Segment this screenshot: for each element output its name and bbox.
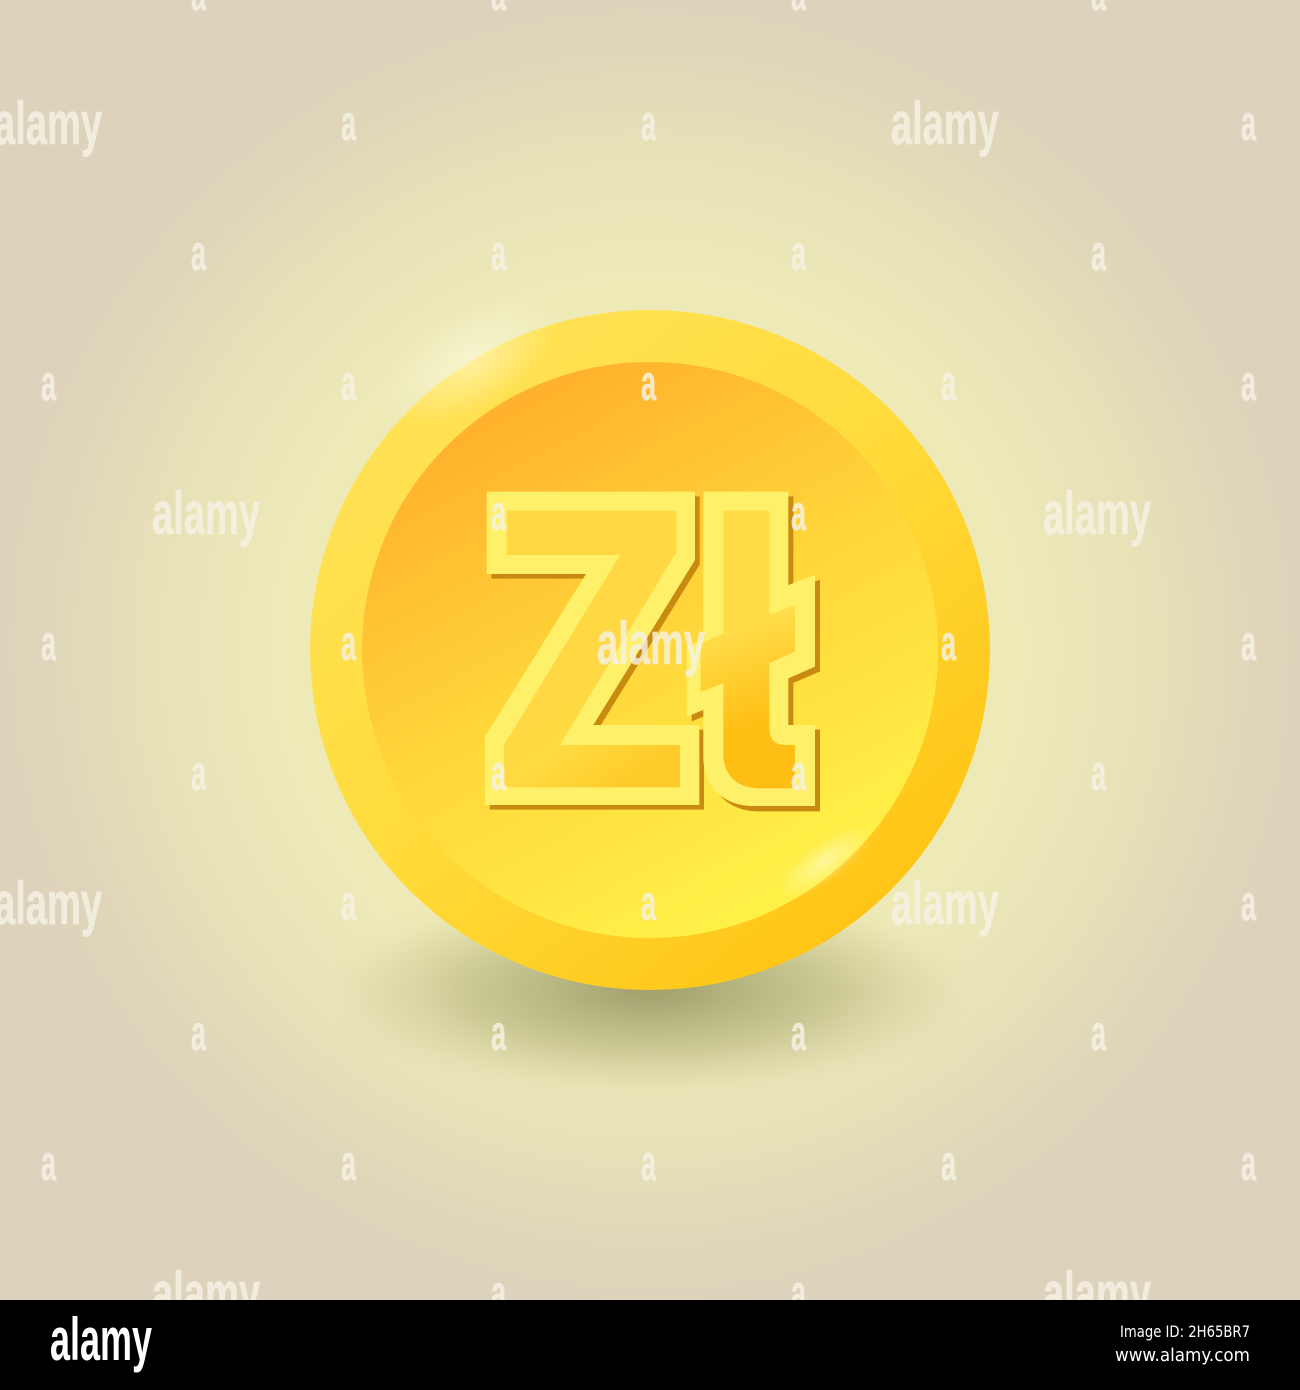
highlight: lower right [768,814,882,910]
footer bar [0,1300,1300,1390]
coin rim [310,310,990,990]
watermark: alamy wordmarks: alamy [1043,1260,1151,1327]
coin drop shadow [335,888,965,1092]
watermark: small a marks: aaaaa [41,1135,1256,1191]
watermark: alamy wordmarks: alamy [1043,480,1151,547]
watermark: small a marks: aaaa [191,225,1106,281]
watermark: small a marks: aa [491,485,806,541]
highlight: upper left [363,269,577,451]
image id: Image ID: 2H65BR7 [1120,1322,1250,1341]
currency symbol Zt [485,492,820,811]
watermark: alamy wordmarks: alamy [152,1260,260,1327]
watermark: alamy wordmarks: alamy [597,610,705,677]
watermark: small a marks: aaaa [191,745,1106,801]
watermark: small a marks: aaaa [191,1005,1106,1061]
watermark: small a marks: aaaaa [41,355,1256,411]
watermark: alamy wordmarks: alamy [152,480,260,547]
watermark: small a marks: aaa [341,95,1256,151]
watermark: small a marks: aaa [341,875,1256,931]
watermark: alamy wordmarks: alamy [891,90,999,157]
coin face [362,362,938,938]
letter Z [485,492,704,810]
gold coin [310,269,990,990]
website: www.alamy.com [1115,1345,1250,1366]
watermark: small a marks: aa [491,1265,806,1321]
footer logo: alamy [50,1306,152,1373]
watermark: alamy wordmarks: alamy [891,870,999,937]
watermark: small a marks: aaaa [41,615,1256,671]
watermark: alamy wordmarks [0,90,1151,1327]
letter t with stroke [687,492,820,811]
